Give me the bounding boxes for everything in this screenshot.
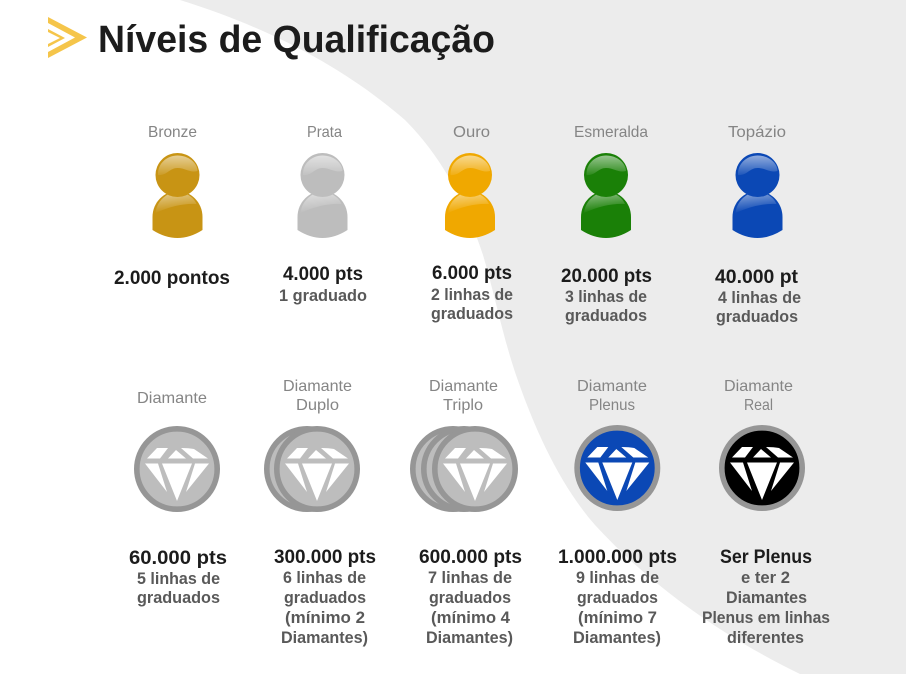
requirement: Diamantes bbox=[726, 589, 807, 607]
requirement: (mínimo 4 bbox=[431, 609, 511, 627]
requirement: Diamantes) bbox=[281, 629, 368, 647]
requirement: Diamantes) bbox=[426, 629, 513, 647]
icon: bronze person bbox=[152, 153, 202, 238]
value: 60.000 pts bbox=[129, 548, 227, 569]
requirement bbox=[716, 289, 801, 326]
column: Diamante Duplo bbox=[267, 378, 376, 647]
requirement: (mínimo 7 bbox=[578, 609, 657, 627]
icon: blue person bbox=[732, 153, 782, 238]
value: 1.000.000 pts bbox=[558, 547, 677, 568]
column: Esmeralda bbox=[561, 124, 652, 325]
value: 20.000 pts bbox=[561, 266, 652, 287]
label: Diamante Duplo bbox=[283, 378, 352, 414]
label: Diamante Triplo: Triplo bbox=[443, 397, 483, 414]
column: Prata bbox=[279, 124, 367, 305]
label: Diamante Duplo: Duplo bbox=[296, 397, 339, 414]
requirement: 1 graduado bbox=[279, 287, 367, 305]
icon: black diamond coin bbox=[722, 428, 802, 508]
requirement: 9 linhas de bbox=[576, 569, 659, 587]
requirement: graduados bbox=[565, 307, 647, 325]
value: 2.000 pontos bbox=[114, 268, 230, 289]
label: Topázio: Topázio bbox=[728, 124, 786, 141]
icon: blue diamond coin bbox=[577, 428, 658, 508]
label: Diamante Plenus bbox=[577, 378, 647, 414]
column: Diamante Triplo bbox=[413, 378, 522, 647]
requirement bbox=[281, 569, 368, 647]
requirement: 6 linhas de bbox=[283, 569, 366, 587]
column: Diamante Real bbox=[702, 378, 830, 647]
requirement bbox=[431, 286, 513, 323]
value: 300.000 pts bbox=[274, 547, 376, 568]
column: Bronze bbox=[114, 124, 230, 289]
column: Ouro bbox=[431, 124, 513, 323]
requirement: 3 linhas de bbox=[565, 288, 647, 306]
requirement bbox=[426, 569, 513, 647]
icon: green person bbox=[581, 153, 631, 238]
value: 40.000 pt bbox=[715, 267, 799, 288]
label: Prata: Prata bbox=[307, 124, 342, 141]
column: Diamante Plenus bbox=[558, 378, 677, 647]
requirement: graduados bbox=[577, 589, 658, 607]
label: Diamante Triplo bbox=[429, 378, 498, 414]
value: Ser Plenus bbox=[720, 547, 812, 568]
label: Diamante Real bbox=[724, 378, 793, 414]
column: Diamante bbox=[129, 390, 227, 607]
requirement: Diamantes) bbox=[573, 629, 661, 647]
label: Diamante Plenus: Plenus bbox=[589, 397, 635, 414]
label: Diamante Plenus: Diamante bbox=[577, 378, 647, 395]
label: Diamante Duplo: Diamante bbox=[283, 378, 352, 395]
column: Topázio bbox=[715, 124, 801, 326]
requirement: graduados bbox=[429, 589, 511, 607]
label: Diamante Triplo: Diamante bbox=[429, 378, 498, 395]
value: 4.000 pts bbox=[283, 264, 363, 285]
requirement: 5 linhas de bbox=[137, 570, 220, 588]
requirement: diferentes bbox=[727, 629, 804, 647]
value: 6.000 pts bbox=[432, 263, 512, 284]
title: Níveis de Qualificação bbox=[98, 19, 495, 61]
requirement: e ter 2 bbox=[741, 569, 790, 587]
label: Diamante Real: Real bbox=[744, 397, 773, 414]
requirement: graduados bbox=[716, 308, 798, 326]
requirement: 7 linhas de bbox=[428, 569, 512, 587]
icon: silver person bbox=[298, 153, 348, 238]
requirement: 4 linhas de bbox=[718, 289, 801, 307]
value: 600.000 pts bbox=[419, 547, 522, 568]
icon: diamond coin bbox=[137, 429, 217, 509]
requirement: graduados bbox=[284, 589, 366, 607]
label: Ouro: Ouro bbox=[453, 124, 490, 141]
requirement: 2 linhas de bbox=[431, 286, 513, 304]
icon: triple diamond coin bbox=[413, 429, 515, 509]
label: Diamante Real: Diamante bbox=[724, 378, 793, 395]
requirement bbox=[702, 569, 830, 647]
label: Diamante: Diamante bbox=[137, 390, 207, 407]
icon: double diamond coin bbox=[267, 429, 357, 509]
requirement bbox=[565, 288, 647, 325]
icon: double chevron bbox=[48, 17, 87, 58]
label: Esmeralda: Esmeralda bbox=[574, 124, 648, 141]
icon: gold person bbox=[445, 153, 495, 238]
label: Bronze: Bronze bbox=[148, 124, 197, 141]
requirement: (mínimo 2 bbox=[285, 609, 365, 627]
requirement bbox=[573, 569, 661, 647]
requirement: Plenus em linhas bbox=[702, 609, 830, 627]
requirement: graduados bbox=[137, 589, 220, 607]
requirement: graduados bbox=[431, 305, 513, 323]
requirement bbox=[137, 570, 220, 607]
